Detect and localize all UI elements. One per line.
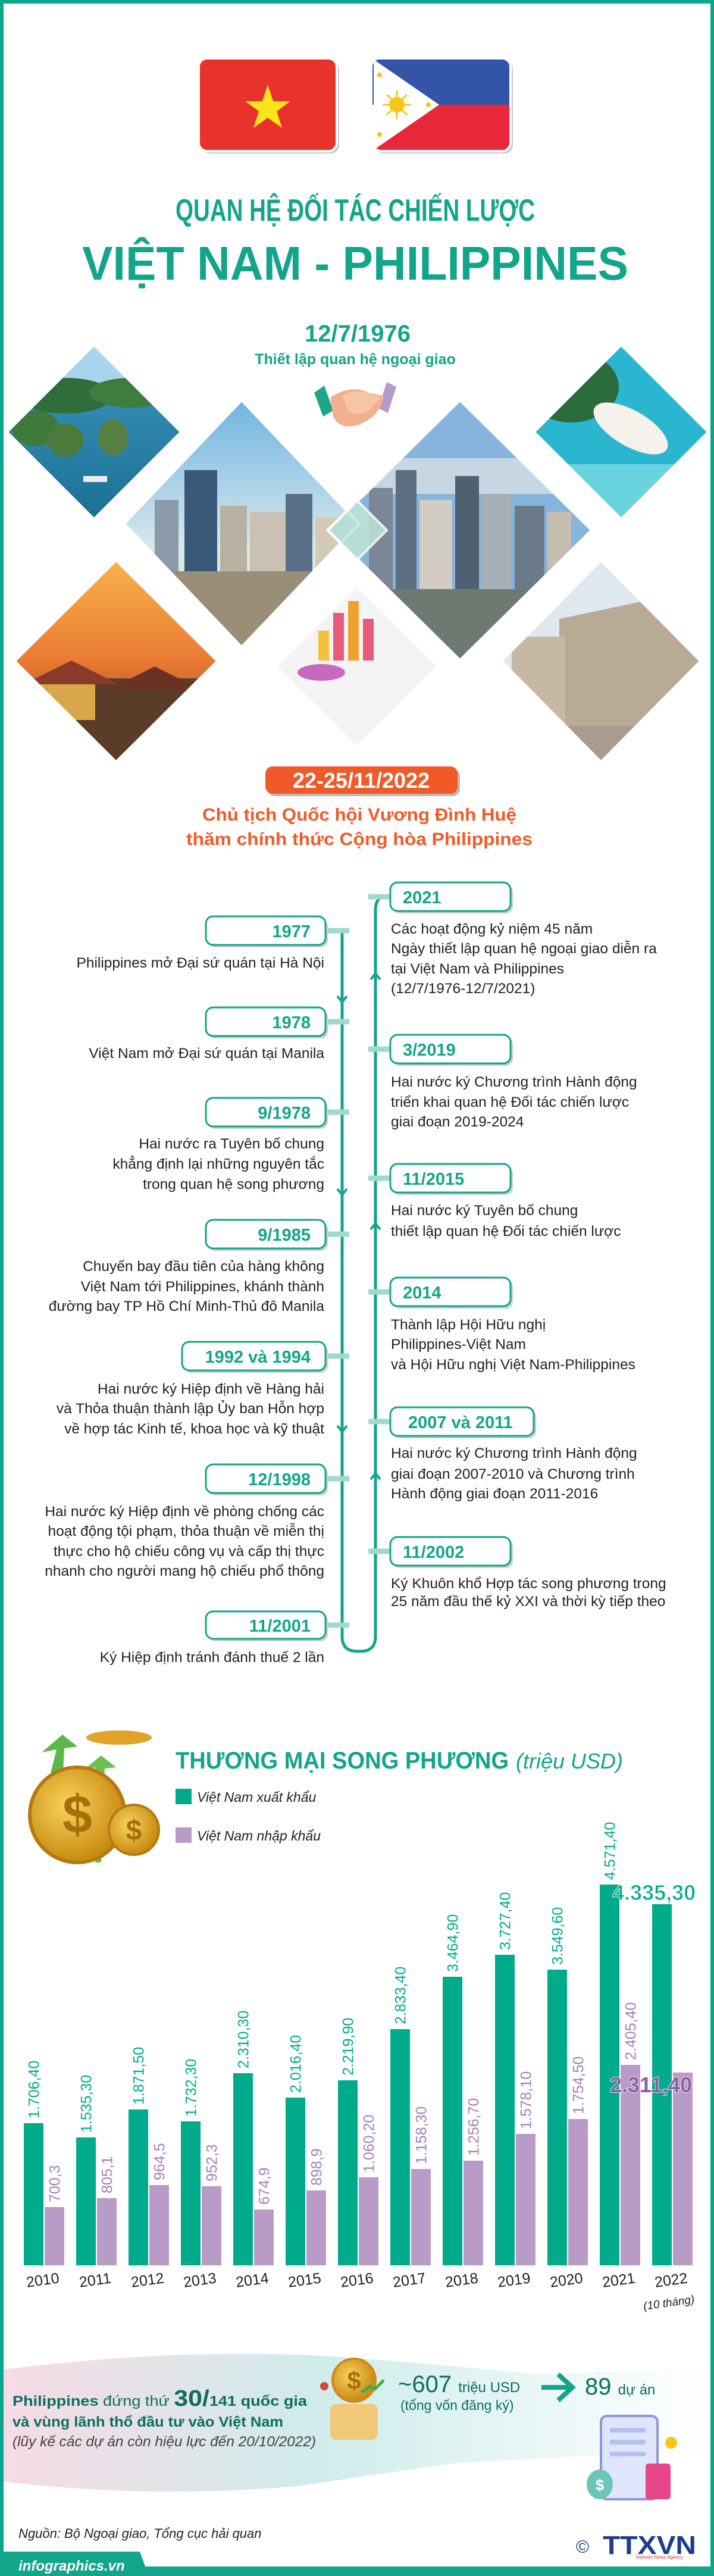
right event texts: triển khai quan hệ Đối tác chiến lược bbox=[391, 1094, 629, 1110]
footer bbox=[0, 2552, 714, 2576]
year labels: 2021 bbox=[601, 2270, 636, 2291]
import value labels: 2.405,40 bbox=[622, 2002, 639, 2060]
export value labels: 1.535,30 bbox=[79, 2075, 95, 2133]
left event texts: hoạt động tội phạm, thỏa thuận về miễn thị bbox=[48, 1523, 324, 1539]
left badges bbox=[182, 916, 328, 1641]
left event texts: Hai nước ký Hiệp định về phòng chống các bbox=[45, 1504, 324, 1520]
year labels: 2012 bbox=[130, 2270, 165, 2291]
import value labels: 1.158,30 bbox=[413, 2107, 430, 2164]
import value labels: 1.060,20 bbox=[361, 2115, 377, 2173]
right event texts: Thành lập Hội Hữu nghị bbox=[391, 1317, 546, 1333]
right event texts bbox=[391, 921, 666, 1610]
export value labels: 2.016,40 bbox=[288, 2035, 305, 2093]
logo: TTXVN: TTXVN bbox=[603, 2531, 696, 2560]
icon: clipboard bbox=[587, 2416, 677, 2499]
chart title: THƯƠNG MẠI SONG PHƯƠNG bbox=[176, 1748, 509, 1774]
chart title: (triệu USD) bbox=[516, 1749, 623, 1773]
import value labels: 898,9 bbox=[308, 2148, 325, 2186]
investment rank text: và vùng lãnh thổ đầu tư vào Việt Nam bbox=[12, 2414, 283, 2430]
connectors bbox=[325, 897, 390, 1625]
photo: Boracay beach bbox=[536, 346, 707, 518]
import value labels: 964,5 bbox=[151, 2143, 168, 2180]
icon: handshake bbox=[314, 382, 396, 427]
right event texts: Các hoạt động kỷ niệm 45 năm bbox=[391, 921, 593, 937]
import value labels: 805,1 bbox=[99, 2156, 115, 2193]
visit badge: 22-25/11/2022 bbox=[293, 768, 430, 793]
icon: clipboard: $ bbox=[596, 2476, 605, 2494]
badge years: 12/1998 bbox=[248, 1470, 311, 1489]
right event texts: Hai nước ký Chương trình Hành động bbox=[391, 1074, 637, 1090]
2022 highlighted labels: 4.335,30 bbox=[612, 1880, 696, 1905]
left event texts bbox=[45, 955, 324, 1666]
badge years: 2021 bbox=[403, 888, 441, 907]
bar chart bbox=[24, 1822, 696, 2313]
year labels: 2017 bbox=[392, 2270, 427, 2291]
year labels: 2019 bbox=[496, 2270, 531, 2291]
export value labels: 3.549,60 bbox=[550, 1907, 566, 1965]
date established: Thiết lập quan hệ ngoại giao bbox=[255, 351, 456, 368]
left event texts: khẳng định lại những nguyên tắc bbox=[112, 1155, 324, 1172]
export value labels: 2.833,40 bbox=[393, 1967, 409, 2024]
investment rank text: (lũy kế các dự án còn hiệu lực đến 20/10/2022) bbox=[12, 2434, 316, 2450]
investment rank text: Philippines đứng thứ 30/ 141 quốc gia bbox=[12, 2386, 308, 2411]
year labels: 2018 bbox=[444, 2270, 479, 2291]
import value labels: 674,9 bbox=[256, 2167, 273, 2205]
export value labels: 1.732,30 bbox=[183, 2059, 200, 2117]
visit subheading: Chủ tịch Quốc hội Vương Đình Huệ bbox=[202, 805, 516, 825]
icon: coin stack: $ bbox=[347, 2367, 361, 2395]
badge years: 9/1978 bbox=[258, 1104, 311, 1123]
flag: Vietnam bbox=[199, 58, 339, 154]
left event texts: thực cho hộ chiếu công vụ và cấp thị thực bbox=[54, 1544, 324, 1560]
left event texts: về hợp tác Kinh tế, khoa học và kỹ thuật bbox=[64, 1421, 324, 1437]
import value labels: 1.578,10 bbox=[518, 2071, 534, 2129]
left event texts: Hai nước ra Tuyên bố chung bbox=[139, 1136, 324, 1152]
left event texts: trong quan hệ song phương bbox=[143, 1176, 324, 1192]
left event texts: đường bay TP Hồ Chí Minh-Thủ đô Manila bbox=[49, 1298, 324, 1314]
source: Nguồn: Bộ Ngoại giao, Tổng cục hải quan bbox=[18, 2526, 262, 2541]
icon: coin stack bbox=[320, 2359, 384, 2440]
left event texts: và Thỏa thuận thành lập Ủy ban Hỗn hợp bbox=[57, 1400, 324, 1417]
investment band bbox=[4, 2354, 710, 2492]
photo: Vigan street bbox=[501, 560, 701, 762]
badge years: 2007 và 2011 bbox=[408, 1413, 513, 1432]
badge years: 9/1985 bbox=[258, 1226, 311, 1245]
year labels: 2022 bbox=[653, 2270, 688, 2291]
export value labels: 1.706,40 bbox=[26, 2061, 43, 2118]
left event texts: Việt Nam tới Philippines, khánh thành bbox=[81, 1279, 324, 1295]
footer: infographics.vn bbox=[18, 2558, 125, 2574]
visit subheading bbox=[186, 805, 533, 849]
right event texts: giai đoạn 2019-2024 bbox=[391, 1114, 524, 1130]
export value labels: 4.571,40 bbox=[602, 1822, 619, 1880]
year labels: 2011 bbox=[78, 2270, 112, 2291]
bar chart: 2.311,40 bbox=[610, 2073, 692, 2097]
badge years bbox=[205, 888, 513, 1636]
capital figure: ~607 triệu USD bbox=[398, 2371, 520, 2397]
right event texts: Hành động giai đoạn 2011-2016 bbox=[391, 1486, 598, 1502]
photo: Manila skyline bbox=[328, 400, 592, 661]
logo: TTXVN: © bbox=[576, 2537, 589, 2557]
badge years: 1978 bbox=[272, 1013, 311, 1032]
timeline bbox=[45, 882, 666, 1666]
badge years: 1992 và 1994 bbox=[205, 1348, 311, 1367]
visit subheading: thăm chính thức Cộng hòa Philippines bbox=[186, 830, 533, 849]
badge years: 1977 bbox=[272, 922, 311, 941]
export value labels: 1.871,50 bbox=[131, 2047, 148, 2105]
capital figure: (tổng vốn đăng ký) bbox=[400, 2397, 514, 2413]
logo: TTXVN: Vietnam News Agency bbox=[635, 2555, 683, 2560]
right badges bbox=[390, 882, 536, 1568]
right event texts: Ký Khuôn khổ Hợp tác song phương trong bbox=[391, 1576, 666, 1592]
photo: chart graphic bbox=[278, 587, 436, 746]
title: VIỆT NAM - PHILIPPINES bbox=[82, 237, 628, 290]
export value labels: 3.464,90 bbox=[445, 1914, 462, 1972]
right event texts: Ngày thiết lập quan hệ ngoại giao diễn ra bbox=[391, 941, 657, 957]
export value labels: 3.727,40 bbox=[497, 1892, 514, 1950]
date established: 12/7/1976 bbox=[305, 321, 411, 347]
year labels: 2010 bbox=[25, 2270, 60, 2291]
photo borders bbox=[7, 345, 709, 762]
icon: coins with arrows: $ bbox=[62, 1785, 92, 1845]
import value labels: 1.754,50 bbox=[570, 2057, 587, 2114]
arrow bbox=[541, 2374, 572, 2400]
left event texts: Chuyến bay đầu tiên của hàng không bbox=[83, 1259, 324, 1275]
right event texts: Hai nước ký Chương trình Hành động bbox=[391, 1445, 637, 1461]
legend: Việt Nam nhập khẩu bbox=[197, 1828, 321, 1843]
import value labels: 700,3 bbox=[46, 2165, 63, 2202]
year labels: 2015 bbox=[287, 2270, 322, 2291]
left event texts: Việt Nam mở Đại sứ quán tại Manila bbox=[89, 1046, 324, 1062]
title bbox=[82, 193, 628, 290]
timeline axis bbox=[342, 896, 387, 1651]
capital figure bbox=[398, 2371, 520, 2413]
year labels: 2013 bbox=[182, 2270, 217, 2291]
legend: Việt Nam xuất khẩu bbox=[197, 1789, 317, 1805]
project count: 89 dự án bbox=[585, 2374, 655, 2400]
right event texts: (12/7/1976-12/7/2021) bbox=[391, 981, 535, 997]
badge years: 11/2002 bbox=[403, 1543, 464, 1562]
left event texts: nhanh cho người mang hộ chiếu phổ thông bbox=[45, 1563, 324, 1579]
import value labels bbox=[46, 2002, 639, 2205]
import value labels: 1.256,70 bbox=[465, 2098, 482, 2156]
badge years: 11/2001 bbox=[249, 1617, 311, 1636]
left event texts: Philippines mở Đại sứ quán tại Hà Nội bbox=[76, 955, 324, 971]
photo: Ha Long bay bbox=[7, 345, 182, 520]
year labels: 2016 bbox=[339, 2270, 374, 2291]
flag: Philippines bbox=[372, 58, 513, 154]
right event texts: Philippines-Việt Nam bbox=[391, 1336, 526, 1353]
year labels: 2020 bbox=[549, 2270, 584, 2291]
right event texts: thiết lập quan hệ Đối tác chiến lược bbox=[391, 1223, 621, 1240]
left event texts: Ký Hiệp định tránh đánh thuế 2 lần bbox=[100, 1649, 324, 1666]
left event texts: Hai nước ký Hiệp định về Hàng hải bbox=[98, 1381, 324, 1397]
export value labels: 2.219,90 bbox=[340, 2018, 357, 2076]
right event texts: giai đoạn 2007-2010 và Chương trình bbox=[391, 1466, 635, 1482]
title: QUAN HỆ ĐỐI TÁC CHIẾN LƯỢC bbox=[176, 193, 535, 228]
legend bbox=[176, 1789, 321, 1843]
investment rank text bbox=[12, 2386, 316, 2450]
year labels: (10 tháng) bbox=[643, 2293, 696, 2313]
icon: coins with arrows bbox=[30, 1730, 159, 1863]
photo: Hoi An bbox=[14, 560, 218, 762]
badge years: 11/2015 bbox=[403, 1170, 464, 1189]
right event texts: và Hội Hữu nghị Việt Nam-Philippines bbox=[391, 1357, 635, 1373]
year labels: 2014 bbox=[234, 2270, 270, 2291]
import value labels: 952,3 bbox=[203, 2144, 220, 2181]
right event texts: Hai nước ký Tuyên bố chung bbox=[391, 1203, 578, 1219]
icon: coins with arrows: $ bbox=[126, 1815, 142, 1846]
badge years: 2014 bbox=[403, 1284, 441, 1303]
visit badge bbox=[265, 766, 460, 796]
year labels bbox=[25, 2270, 696, 2313]
export value labels: 2.310,30 bbox=[236, 2011, 252, 2068]
badge years: 3/2019 bbox=[403, 1041, 456, 1060]
date established bbox=[255, 321, 456, 368]
photo: Hanoi skyline bbox=[124, 400, 359, 649]
export value labels bbox=[26, 1822, 619, 2133]
right event texts: 25 năm đầu thế kỷ XXI và thời kỳ tiếp theo bbox=[391, 1594, 665, 1610]
right event texts: tại Việt Nam và Philippines bbox=[391, 961, 564, 977]
small diamond: green tint bbox=[328, 500, 387, 560]
